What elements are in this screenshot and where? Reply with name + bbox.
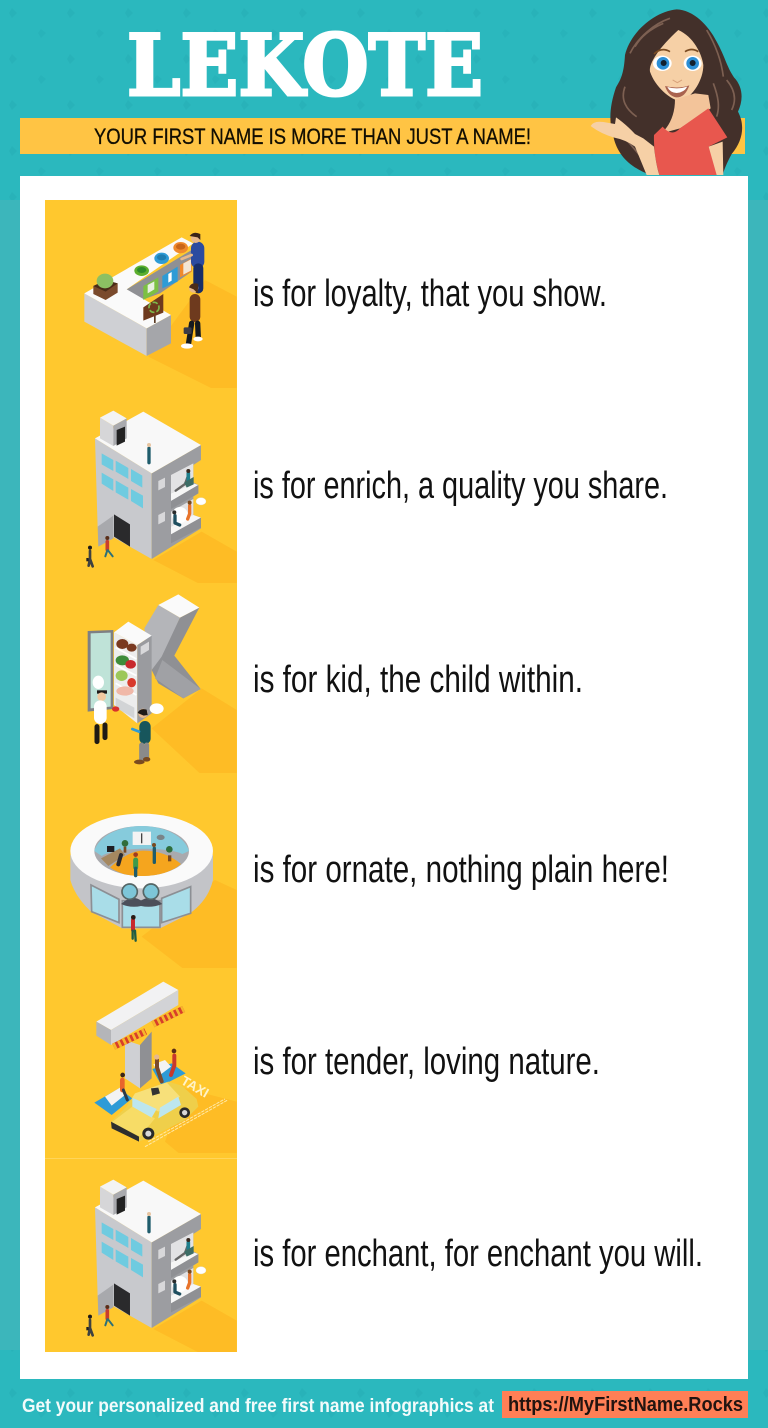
text line: L: is for loyalty, that you show. [253,273,607,315]
row 5 illustration: T taxi stand: TAXI [178,1073,211,1101]
text line: T: is for tender, loving nature. [253,1041,600,1083]
row 5 illustration: T taxi stand [94,982,237,1158]
row 3 illustration: K refrigerator [88,594,237,775]
row 4 illustration: O optician ring [70,814,237,970]
footer call to action: Get your personalized and free first name infographics at [22,1396,495,1417]
tagline banner: YOUR FIRST NAME IS MORE THAN JUST A NAME! [94,124,531,149]
row 6 illustration: E building [86,1180,237,1354]
white content panel [20,176,748,1379]
character: woman presenting [591,9,742,175]
footer link badge: https://MyFirstName.Rocks [508,1394,743,1416]
row 1 illustration: L recycling counter [84,233,237,392]
text line: K: is for kid, the child within. [253,659,583,701]
title: LEKOTE [127,16,483,115]
yellow illustration column [45,200,237,1352]
row 2 illustration: E building [86,411,237,585]
tagline banner [20,118,745,154]
